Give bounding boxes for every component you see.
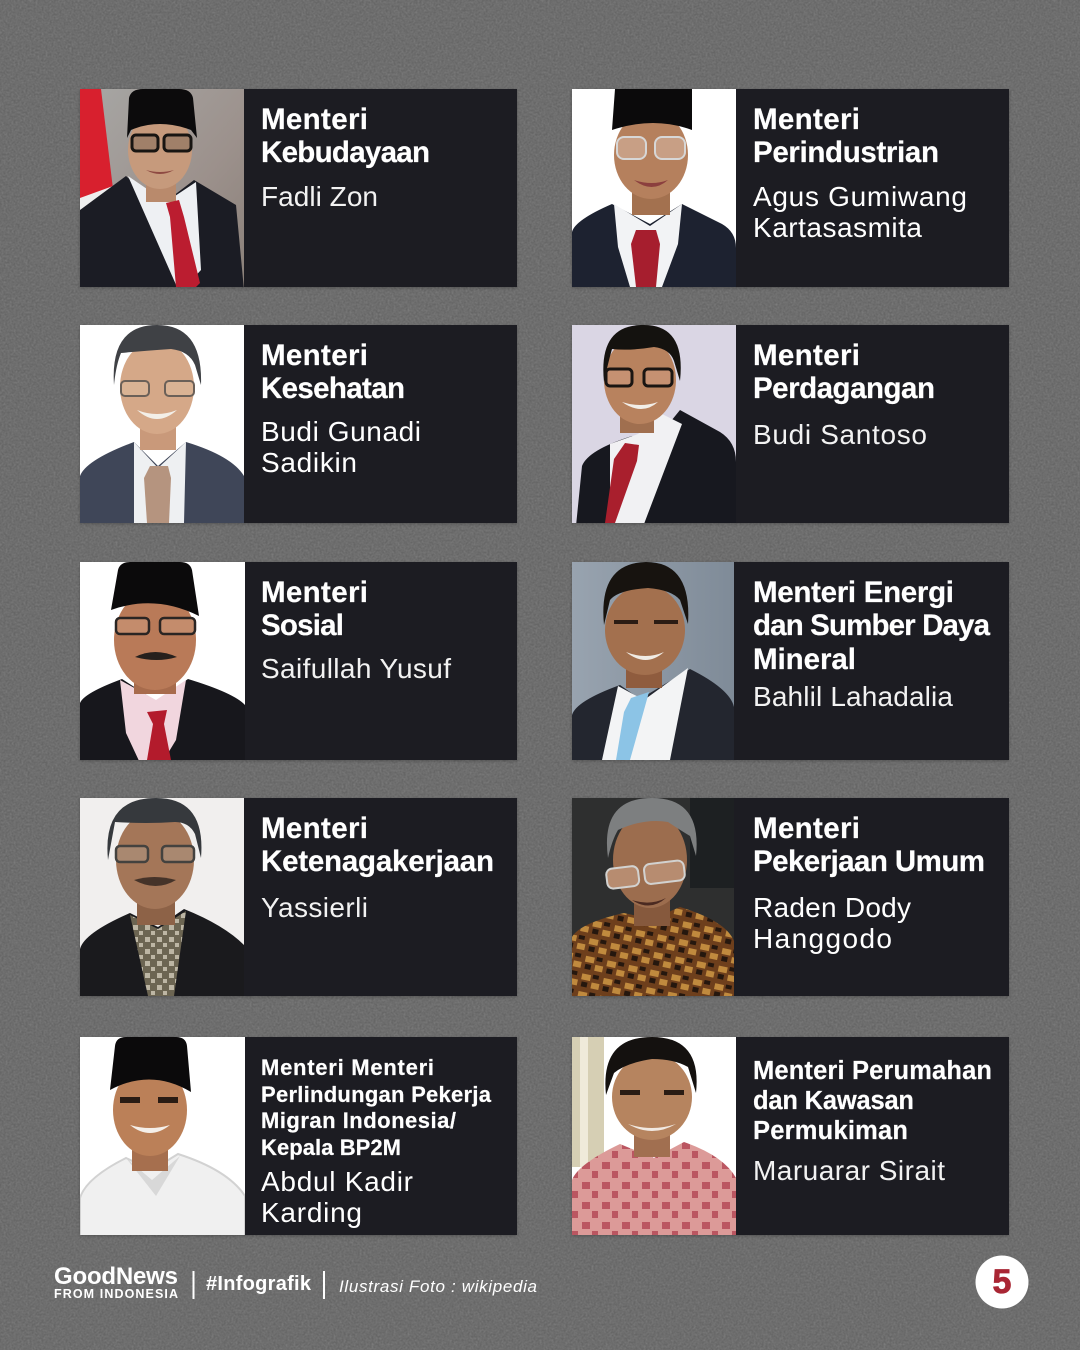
heading: Menteri Sosial: Menteri <box>261 576 368 609</box>
name: Agus Gumiwang Kartasasmita <box>753 181 967 243</box>
name: Budi Santoso: Budi Santoso <box>753 419 927 450</box>
panel: Menteri Pekerjaan Umum <box>572 798 1009 999</box>
heading: Menteri Kesehatan: Menteri <box>261 339 368 372</box>
name: Abdul Kadir Karding <box>261 1166 413 1228</box>
name: Abdul Kadir Karding: Abdul Kadir <box>261 1166 413 1197</box>
heading: Menteri Sosial: Sosial <box>261 609 344 642</box>
panel: Menteri Energi dan Sumber Daya Mineral <box>572 562 1009 763</box>
portrait: Budi Santoso <box>572 325 736 523</box>
heading: Menteri Kebudayaan: Menteri <box>261 103 368 136</box>
portrait: Bahlil Lahadalia <box>572 562 734 760</box>
portrait: Budi Gunadi Sadikin <box>80 325 244 523</box>
heading: Menteri Perumahan dan Kawasan Permukiman: Permukiman <box>753 1117 908 1145</box>
panel: Menteri Sosial <box>80 562 517 763</box>
name: Raden Dody Hanggodo: Raden Dody <box>753 892 911 923</box>
portrait: Maruarar Sirait <box>572 1037 736 1235</box>
heading: Menteri Perdagangan: Menteri <box>753 339 860 372</box>
portrait: Fadli Zon <box>80 89 244 287</box>
footer <box>54 1263 537 1301</box>
photo credit: Ilustrasi Foto : wikipedia <box>339 1277 537 1296</box>
name: Budi Gunadi Sadikin: Sadikin <box>261 447 357 478</box>
page number <box>976 1256 1028 1308</box>
heading: Menteri Ketenagakerjaan: Ketenagakerjaan <box>261 845 494 878</box>
portrait: Agus Gumiwang Kartasasmita <box>572 89 736 287</box>
heading: Menteri Ketenagakerjaan <box>261 812 494 878</box>
heading: Menteri Perindustrian: Perindustrian <box>753 136 939 169</box>
name: Budi Gunadi Sadikin: Budi Gunadi <box>261 416 421 447</box>
heading: Menteri Perlindungan Pekerja Migran Indonesia / Kepala BP2M: Perlindungan Pekerja <box>261 1082 492 1107</box>
name: Budi Gunadi Sadikin <box>261 416 421 478</box>
panel: Menteri Ketenagakerjaan <box>80 798 517 999</box>
portrait: Yassierli <box>80 798 244 996</box>
heading: Menteri Energi dan Sumber Daya Mineral <box>753 576 991 676</box>
heading: Menteri Perlindungan Pekerja Migran Indonesia / Kepala BP2M: Kepala BP2M <box>261 1135 401 1160</box>
heading: Menteri Energi dan Sumber Daya Mineral: Mineral <box>753 643 856 676</box>
name: Raden Dody Hanggodo <box>753 892 911 954</box>
page number: 5 <box>993 1263 1011 1301</box>
name: Raden Dody Hanggodo: Hanggodo <box>753 923 892 954</box>
hashtag: #Infografik <box>206 1273 312 1295</box>
heading: Menteri Perlindungan Pekerja Migran Indonesia / Kepala BP2M: Migran Indonesia/ <box>261 1108 456 1133</box>
heading: Menteri Perlindungan Pekerja Migran Indonesia / Kepala BP2M: Menteri Menteri <box>261 1055 434 1080</box>
panel: Menteri Kesehatan <box>80 325 517 526</box>
heading: Menteri Perdagangan: Perdagangan <box>753 372 935 405</box>
name: Maruarar Sirait: Maruarar Sirait <box>753 1155 945 1186</box>
logo: GoodNews from Indonesia: FROM INDONESIA <box>54 1287 178 1301</box>
heading: Menteri Pekerjaan Umum: Pekerjaan Umum <box>753 845 985 878</box>
heading: Menteri Perumahan dan Kawasan Permukiman <box>753 1057 992 1145</box>
name: Agus Gumiwang Kartasasmita: Agus Gumiwang <box>753 181 967 212</box>
name: Abdul Kadir Karding: Karding <box>261 1197 362 1228</box>
heading: Menteri Kebudayaan: Kebudayaan <box>261 136 430 169</box>
name: Bahlil Lahadalia: Bahlil Lahadalia <box>753 681 953 712</box>
heading: Menteri Kesehatan <box>261 339 405 405</box>
heading: Menteri Energi dan Sumber Daya Mineral: dan Sumber Daya <box>753 609 991 642</box>
panel: Menteri Perdagangan <box>572 325 1009 526</box>
heading: Menteri Energi dan Sumber Daya Mineral: Menteri Energi <box>753 576 954 609</box>
heading: Menteri Perindustrian <box>753 103 939 169</box>
heading: Menteri Ketenagakerjaan: Menteri <box>261 812 368 845</box>
heading: Menteri Sosial <box>261 576 368 642</box>
heading: Menteri Perumahan dan Kawasan Permukiman: dan Kawasan <box>753 1087 914 1115</box>
panel: Menteri Perlindungan Pekerja Migran <box>80 1037 517 1238</box>
heading: Menteri Pekerjaan Umum: Menteri <box>753 812 860 845</box>
heading: Menteri Perindustrian: Menteri <box>753 103 860 136</box>
name: Fadli Zon: Fadli Zon <box>261 181 378 212</box>
name: Yassierli: Yassierli <box>261 892 368 923</box>
heading: Menteri Perumahan dan Kawasan Permukiman: Menteri Perumahan <box>753 1057 992 1085</box>
heading: Menteri Kebudayaan <box>261 103 430 169</box>
portrait: Saifullah Yusuf <box>80 562 245 760</box>
heading: Menteri Perdagangan <box>753 339 935 405</box>
portrait: Dody Hanggodo <box>572 798 734 996</box>
logo: GoodNews from Indonesia: GoodNews <box>54 1263 178 1290</box>
name: Agus Gumiwang Kartasasmita: Kartasasmita <box>753 212 922 243</box>
panel: Menteri Kebudayaan <box>80 89 517 290</box>
panel: Menteri Perindustrian <box>572 89 1009 290</box>
panel: Menteri Perumahan dan Kawasan Permukiman <box>572 1037 1009 1238</box>
heading: Menteri Perlindungan Pekerja Migran Indonesia / Kepala BP2M <box>261 1055 492 1160</box>
heading: Menteri Pekerjaan Umum <box>753 812 985 878</box>
portrait: Abdul Kadir Karding <box>80 1037 245 1235</box>
name: Saifullah Yusuf: Saifullah Yusuf <box>261 653 451 684</box>
heading: Menteri Kesehatan: Kesehatan <box>261 372 405 405</box>
